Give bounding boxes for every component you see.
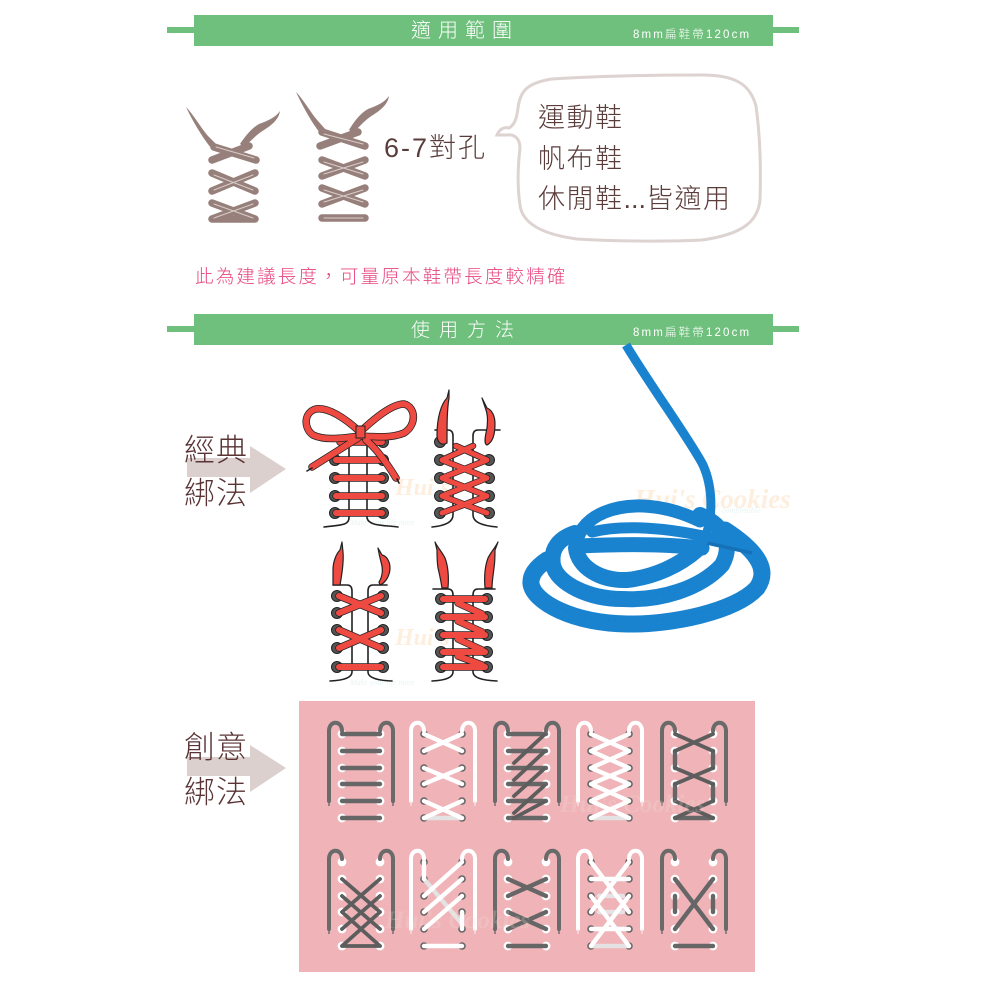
watermark: over illustrations and photo: Make your life more (349, 678, 415, 687)
watermarks on panel: Hui's Cookies (384, 907, 530, 934)
heading: classic lacing: 綁法 (184, 476, 248, 511)
bubble text: 休閒鞋...皆適用 (538, 184, 732, 214)
bubble text: 運動鞋 (538, 103, 624, 133)
section header: 使用方法: 8mm扁鞋帶120cm (633, 326, 751, 339)
watermarks on panel: Hui's Cookies (559, 791, 705, 818)
diagram: dense diagonal weave (329, 851, 393, 950)
speech bubble (497, 75, 760, 241)
diagram: paired crosses (411, 723, 475, 822)
diagram: single large cross (662, 851, 726, 950)
diagram: straight bars (329, 723, 393, 822)
diagram: parallel diagonals (411, 851, 475, 950)
watermark: over illustrations and photo: Hui's (394, 475, 450, 501)
bubble text: 帆布鞋 (538, 144, 624, 174)
illustration: criss-cross lacing (432, 390, 500, 527)
diagram: zigzag (495, 723, 559, 822)
watermark: over illustrations and photo (349, 475, 791, 687)
diagram: full criss-cross (578, 723, 642, 822)
icon: lacing with 6 pairs of eyelets (186, 107, 280, 219)
illustration: zigzag lacing (432, 542, 498, 681)
arrow: classic lacing (187, 446, 286, 493)
section header: 適用範圍 (167, 15, 799, 46)
illustration: bow tie lacing (306, 404, 413, 527)
bubble text (538, 103, 732, 214)
icon: lacing with 7 pairs of eyelets (296, 92, 389, 218)
heading: classic lacing (184, 433, 248, 511)
arrow: creative lacing (187, 745, 286, 792)
section header: 適用範圍: 8mm扁鞋帶120cm (633, 28, 751, 41)
illustration: double x lacing (330, 542, 392, 681)
diagram: crosses with verticals (662, 723, 726, 822)
heading: classic lacing: 經典 (184, 433, 248, 468)
watermark: over illustrations and photo: Make your life more (349, 518, 415, 527)
diagram: two crosses (495, 851, 559, 950)
section header: 適用範圍: 適用範圍 (411, 19, 519, 42)
section header: 使用方法: 使用方法 (411, 319, 523, 341)
heading: creative lacing: 綁法 (184, 775, 248, 810)
photo: blue flat shoelace (531, 345, 762, 624)
note text: 此為建議長度，可量原本鞋帶長度較精確 (195, 266, 568, 287)
watermark: over illustrations and photo: Hui's Cookies (633, 484, 791, 514)
panel: creative lacing methods (299, 701, 755, 972)
section header: 使用方法 (167, 314, 799, 345)
label: 6-7 pairs: 6-7對孔 (384, 133, 487, 163)
watermarks on panel (384, 791, 705, 934)
heading: creative lacing (184, 730, 248, 810)
diagram: star pattern (578, 851, 642, 950)
watermark: over illustrations and photo: Hui's (394, 625, 450, 651)
heading: creative lacing: 創意 (184, 730, 248, 765)
watermark: over illustrations and photo: comfortable (722, 506, 761, 515)
